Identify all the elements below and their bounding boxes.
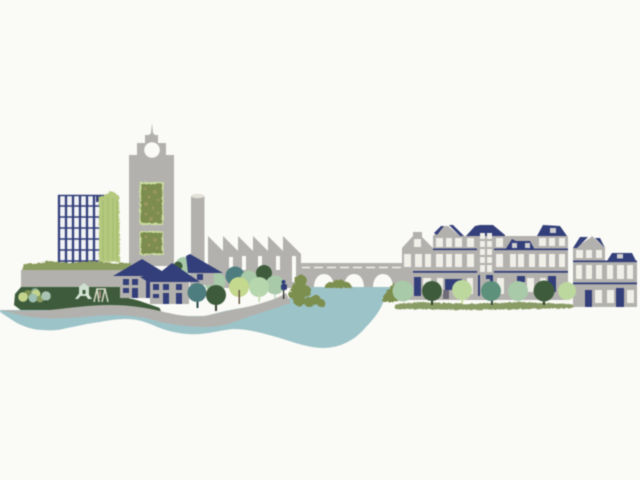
stone arched bridge: [298, 263, 406, 287]
gray riverside road: [0, 293, 291, 327]
living wall lower: [140, 231, 164, 255]
water: [0, 287, 392, 348]
town hedge: [395, 302, 574, 310]
swing set: [94, 289, 108, 302]
house E: [573, 236, 607, 307]
living wall upper: [140, 182, 164, 225]
sawtooth factory: [208, 236, 301, 288]
shrubs left: [18, 288, 51, 304]
left house: [120, 275, 152, 298]
clock tower: [129, 123, 174, 266]
navy bands and doors: [413, 248, 637, 307]
houses: [113, 254, 223, 304]
blue glass tower: [58, 195, 105, 263]
house B: [433, 226, 478, 300]
back house: [190, 265, 214, 285]
sand area: [131, 296, 285, 316]
dark green garden: [14, 287, 161, 311]
riverbank bushes: [288, 275, 325, 307]
roof garden: [22, 261, 131, 271]
bush at bridge end: [382, 283, 398, 302]
person with bicycle: [443, 290, 449, 299]
chimney: [191, 194, 204, 262]
centre block: [478, 233, 494, 300]
bush under bridge: [325, 280, 351, 288]
front tree teal: [188, 283, 206, 308]
back trees, left cluster: [174, 257, 284, 304]
house F: [607, 261, 637, 307]
windows: [404, 233, 634, 303]
front house: [150, 281, 189, 304]
town trees: [392, 280, 576, 305]
townhouses: [402, 225, 637, 307]
cyclist: [281, 280, 287, 299]
house D: [537, 236, 568, 300]
front tree dark green: [206, 285, 226, 311]
gabled house A: [402, 232, 433, 300]
house C: [494, 236, 537, 300]
concrete terrace: [21, 270, 131, 289]
green facade on tower: [99, 191, 120, 262]
slide play structure: [75, 283, 92, 299]
